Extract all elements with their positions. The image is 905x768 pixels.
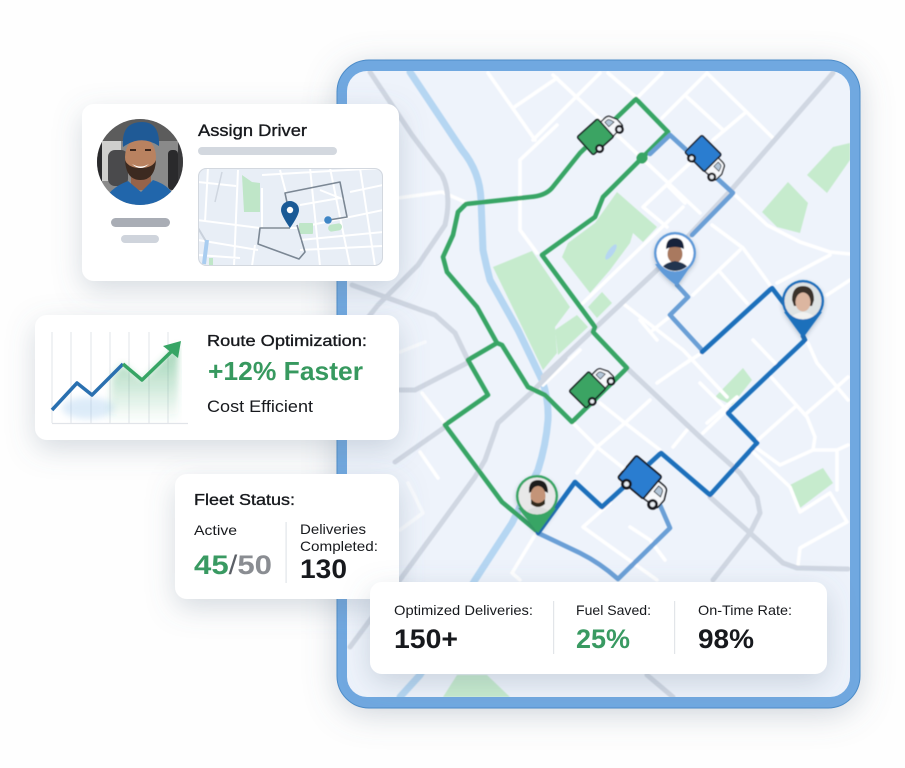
mini route xyxy=(258,182,347,259)
heading: fleet status: Fleet Status: xyxy=(194,492,295,509)
driver detail placeholder xyxy=(121,235,159,243)
stat: optimized deliveries: 150+ xyxy=(394,624,458,654)
panel: route optimization xyxy=(35,315,399,440)
stat: on-time rate xyxy=(698,602,792,654)
mini destination dot xyxy=(324,216,332,224)
metric: faster: +12% Faster xyxy=(208,356,363,386)
driver portrait xyxy=(97,119,184,205)
mini map xyxy=(197,168,383,266)
label: active: Active xyxy=(194,522,237,538)
metric: active count: 45/50 xyxy=(194,550,272,580)
label: cost efficient: Cost Efficient xyxy=(207,398,313,416)
stat: optimized deliveries: Optimized Deliveries: xyxy=(394,602,533,618)
pin: driver three xyxy=(516,475,558,533)
mini parks xyxy=(209,175,343,265)
stat: optimized deliveries xyxy=(394,602,533,654)
blue route light xyxy=(538,135,733,579)
subtitle placeholder xyxy=(198,147,337,155)
label: deliveries completed: Deliveries xyxy=(300,521,366,537)
map grey roads xyxy=(350,72,848,697)
truck: blue bottom xyxy=(616,454,668,511)
driver name placeholder xyxy=(111,218,170,227)
line chart xyxy=(52,332,188,424)
tablet frame xyxy=(337,60,860,708)
heading: assign driver: Assign Driver xyxy=(198,122,308,140)
label: deliveries completed: Completed: xyxy=(300,538,378,554)
truck: blue top xyxy=(684,134,726,182)
stat: fuel saved: 25% xyxy=(576,624,630,654)
map xyxy=(350,72,850,697)
waypoint dot xyxy=(636,152,648,164)
metric: deliveries completed: 130 xyxy=(300,554,347,584)
blue route dark xyxy=(538,288,805,533)
heading: route optimization: Route Optimization: xyxy=(207,333,367,350)
pin: driver two xyxy=(782,280,824,338)
map white roads xyxy=(398,73,850,580)
stat: on-time rate: On-Time Rate: xyxy=(698,602,792,618)
divider xyxy=(286,522,287,583)
green route xyxy=(443,99,668,532)
map river xyxy=(400,72,619,697)
panel: stats bar xyxy=(370,582,827,674)
stat: fuel saved xyxy=(576,602,651,654)
truck: green top xyxy=(576,114,624,156)
mini pin xyxy=(281,201,299,228)
stat: on-time rate: 98% xyxy=(698,624,754,654)
stat: fuel saved: Fuel Saved: xyxy=(576,602,651,618)
panel: assign driver xyxy=(82,104,399,281)
panel: fleet status xyxy=(175,474,399,599)
map parks xyxy=(443,143,850,697)
truck: green middle xyxy=(568,367,616,409)
pin: driver one xyxy=(654,232,696,286)
